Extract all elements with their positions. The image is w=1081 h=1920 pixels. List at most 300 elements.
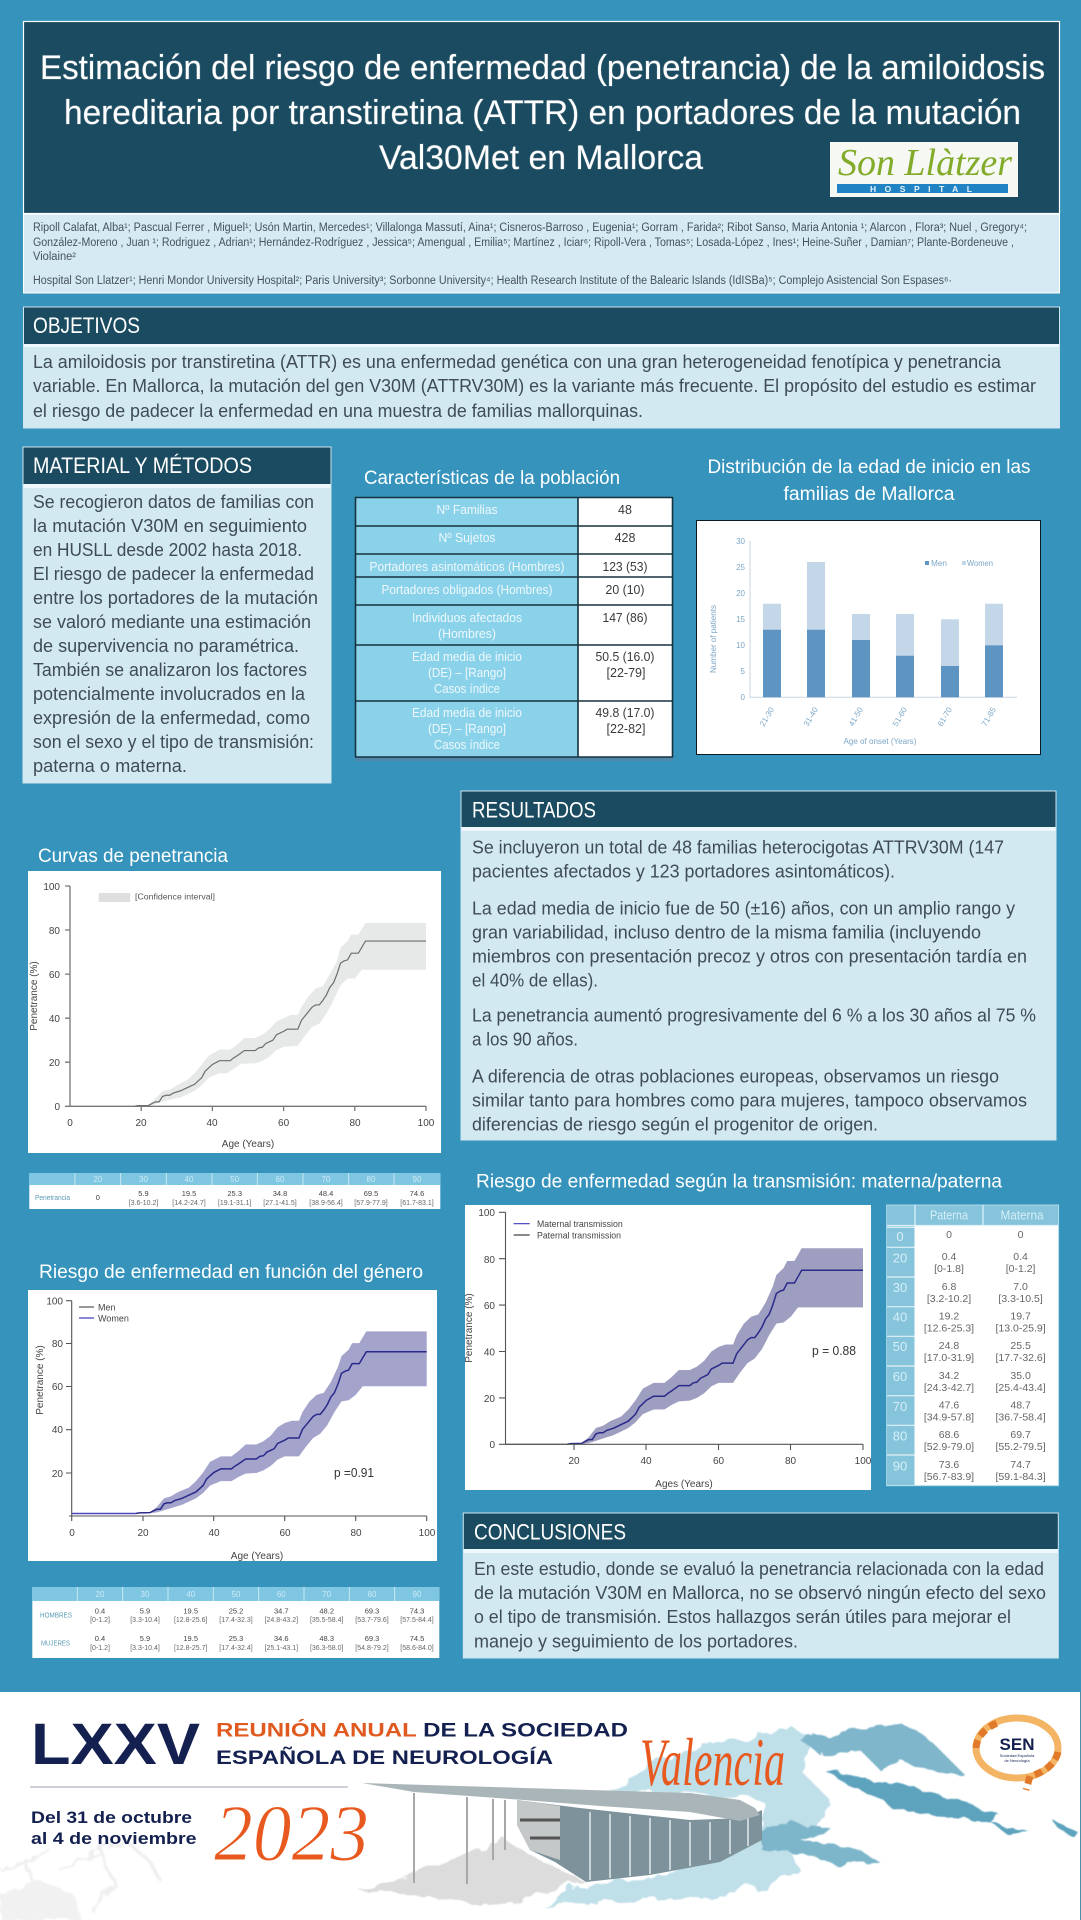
row labels: edades: 0 xyxy=(896,1229,904,1244)
axis labels: 40 xyxy=(206,1118,218,1129)
p value: p =0.91 xyxy=(334,1465,374,1480)
text: material y métodos body: Se recogieron datos de familias con xyxy=(33,492,314,512)
text: resultado 2: gran variabilidad, incluso dentro de la misma familia (incluyendo xyxy=(472,922,981,942)
panel: authors and affiliations: Violaine² xyxy=(33,251,76,263)
axis labels: 0 xyxy=(69,1528,75,1539)
axis labels: 40 xyxy=(52,1425,63,1436)
row: edad media de inicio 2: [22-82] xyxy=(606,722,646,736)
row: mujeres: 0.4 xyxy=(95,1634,105,1643)
row labels: edades: 90 xyxy=(893,1458,907,1474)
column: materna: [25.4-43.4] xyxy=(995,1382,1046,1394)
text: objetivos body: variable. En Mallorca, la mutación del gen V30M (ATTRV30M) es la variante más frecuente. El propósito del estudio es estimar xyxy=(33,376,1036,396)
panel: authors and affiliations xyxy=(24,214,1060,293)
chart: riesgo en función del género xyxy=(28,1290,437,1562)
column: materna: 69.7 xyxy=(1010,1429,1031,1441)
axis labels xyxy=(464,1208,872,1490)
row: mujeres: 34.6 xyxy=(274,1634,289,1643)
row: penetrancia: [3.6-10.2] xyxy=(129,1200,158,1207)
text: conclusiones body: o el tipo de transmisión. Estos hallazgos serán útiles para mejorar el xyxy=(474,1607,1011,1627)
text: material y métodos body xyxy=(33,492,318,776)
row: mujeres: 25.3 xyxy=(229,1634,243,1643)
title: hereditaria por transtiretina (ATTR) en portadores de la mutación xyxy=(64,94,1021,132)
x axis labels: 31-40 xyxy=(802,705,820,728)
row: penetrancia: 5.9 xyxy=(138,1189,149,1198)
row: mujeres: 48.3 xyxy=(319,1634,334,1643)
text: conclusiones body: de la mutación V30M en Mallorca, no se observó ningún efecto del sexo xyxy=(474,1583,1046,1603)
header row: 30 xyxy=(139,1175,148,1184)
legend xyxy=(514,1219,623,1240)
heading: riesgo según género: Riesgo de enfermedad en función del género xyxy=(39,1262,423,1283)
axis labels: 80 xyxy=(49,926,60,937)
text: resultado 4: A diferencia de otras poblaciones europeas, observamos un riesgo xyxy=(472,1066,999,1086)
text: resultado 2: miembros con presentación precoz y otros con presentación tardía en xyxy=(472,947,1027,967)
legend: Men xyxy=(931,559,947,568)
row: portadores obligados xyxy=(382,583,644,597)
row: edad media de inicio 2: 49.8 (17.0) xyxy=(596,706,654,720)
text: material y métodos body: También se analizaron los factores xyxy=(33,660,307,680)
column: paterna: 47.6 xyxy=(939,1400,959,1412)
row: penetrancia: [14.2-24.7] xyxy=(172,1200,206,1207)
row labels: edades: 60 xyxy=(893,1369,907,1384)
header row: 50 xyxy=(232,1590,241,1599)
text: conclusiones body xyxy=(474,1559,1046,1651)
axis labels: 80 xyxy=(350,1528,362,1539)
bar: 21-30 xyxy=(763,604,781,697)
column: materna: 35.0 xyxy=(1010,1370,1031,1382)
axis labels: 20 xyxy=(137,1528,149,1539)
row: mujeres: 5.9 xyxy=(140,1634,150,1643)
axis labels: 100 xyxy=(43,882,60,893)
row: hombres: 0.4 xyxy=(95,1606,105,1616)
y axis labels: 30 xyxy=(736,537,746,546)
axis labels xyxy=(35,1296,436,1562)
column: paterna: 19.2 xyxy=(939,1310,959,1322)
heading: características de la población: Características de la población xyxy=(364,468,620,489)
row: hombres: HOMBRES xyxy=(40,1611,72,1620)
y axis labels xyxy=(736,537,746,702)
column: paterna xyxy=(924,1229,974,1483)
legend: Men xyxy=(98,1302,116,1312)
bar: 51-60 xyxy=(896,614,914,697)
column: materna: 48.7 xyxy=(1010,1400,1031,1412)
column: materna: [36.7-58.4] xyxy=(995,1412,1046,1424)
row: penetrancia: 25.3 xyxy=(227,1189,242,1198)
header row: 60 xyxy=(276,1175,285,1184)
panel: resultados xyxy=(461,791,1056,1140)
row: edad media de inicio 1: (DE) – [Rango] xyxy=(428,666,506,680)
header row xyxy=(96,1590,422,1599)
row: mujeres: [17.4-32.4] xyxy=(219,1645,253,1652)
row: mujeres: 74.5 xyxy=(410,1634,424,1643)
y axis labels: 0 xyxy=(741,693,746,702)
row: penetrancia: Penetrancia xyxy=(35,1193,71,1202)
axis labels: 100 xyxy=(418,1118,435,1129)
row: portadores obligados: Portadores obligados (Hombres) xyxy=(382,583,552,597)
column: paterna: [3.2-10.2] xyxy=(927,1293,971,1305)
text: resultado 4 xyxy=(472,1066,1027,1135)
axis labels: 60 xyxy=(278,1118,290,1129)
row: mujeres: MUJERES xyxy=(41,1639,70,1648)
row: individuos afectados: 147 (86) xyxy=(602,611,648,625)
axis labels: 20 xyxy=(49,1058,60,1069)
chart: curvas de penetrancia xyxy=(28,871,441,1153)
row: hombres: [17.4-32.3] xyxy=(219,1617,253,1624)
column: paterna: 0.4 xyxy=(942,1251,956,1263)
column: materna: [3.3-10.5] xyxy=(998,1293,1043,1305)
text: objetivos body xyxy=(33,352,1036,421)
axes xyxy=(65,886,426,1111)
heading: material y métodos: MATERIAL Y MÉTODOS xyxy=(33,453,252,478)
header row: 40 xyxy=(185,1175,194,1184)
heading: curvas de penetrancia: Curvas de penetrancia xyxy=(38,846,228,867)
axis labels: 40 xyxy=(49,1014,60,1025)
heading: reunión anual xyxy=(216,1720,628,1769)
confidence band and curves xyxy=(506,1248,863,1444)
header row xyxy=(930,1208,1044,1222)
text: fechas: al 4 de noviembre xyxy=(31,1830,196,1848)
column: paterna: 0 xyxy=(946,1229,952,1241)
illustration: edificio xyxy=(358,1783,762,1905)
bar: 41-50 xyxy=(852,614,870,697)
row: hombres: 48.2 xyxy=(319,1606,334,1616)
row: mujeres: [12.8-25.7] xyxy=(174,1645,207,1652)
row: penetrancia: 19.5 xyxy=(182,1189,196,1198)
panel: authors and affiliations: González-Moreno , Juan ¹; Rodriguez , Adrian¹; Hernández-Rodríguez , Jessica⁵; Amengual , Emilia⁵; Martínez , Iciar⁶; Ripoll-Vera , Tomas⁵; Losada-López , Ines¹; Heine-Suñer , Damian⁷; Plante-Bordeneuve , xyxy=(33,237,1014,249)
column: materna: [59.1-84.3] xyxy=(995,1471,1046,1483)
heading: resultados: RESULTADOS xyxy=(472,798,596,823)
text: resultado 3: a los 90 años. xyxy=(472,1030,578,1050)
logo: Son Llàtzer Hospital: HOSPITAL xyxy=(870,184,972,194)
x axis labels: 71-85 xyxy=(980,705,998,728)
chart: distribución de edad de inicio (barras apiladas) xyxy=(696,520,1040,754)
column: materna xyxy=(995,1229,1046,1483)
panel: conclusiones xyxy=(463,1513,1058,1658)
column: materna: 0 xyxy=(1018,1229,1024,1241)
panel: objetivos xyxy=(24,307,1060,428)
row: hombres: [24.8-43.2] xyxy=(265,1617,298,1624)
row: penetrancia xyxy=(35,1189,434,1207)
axis labels: 80 xyxy=(349,1118,361,1129)
axis labels: 20 xyxy=(52,1469,63,1480)
axis title: number of patients: Number of patients xyxy=(709,605,718,673)
row: Nº familias xyxy=(436,503,632,517)
row: hombres: [0-1.2] xyxy=(90,1617,110,1624)
legend xyxy=(925,559,993,568)
row: edad media de inicio 1: Edad media de inicio xyxy=(412,650,522,664)
row: Nº familias: Nº Familias xyxy=(436,503,498,517)
text: material y métodos body: paterna o materna. xyxy=(33,756,187,776)
x axis labels xyxy=(758,705,998,728)
axis labels xyxy=(29,882,435,1150)
column: materna: 25.5 xyxy=(1010,1340,1031,1352)
row: mujeres: [25.1-43.1] xyxy=(265,1645,298,1652)
row: edad media de inicio 1 xyxy=(412,650,654,696)
table: hombres y mujeres por edad xyxy=(32,1587,439,1658)
header row: 70 xyxy=(322,1175,331,1184)
row: hombres: 25.2 xyxy=(229,1606,243,1616)
panel: authors and affiliations: Hospital Son Llatzer¹; Henri Mondor University Hospital²; Paris University³; Sorbonne University⁴; Health Research Institute of the Balearic Islands (IdISBa)⁵; Complejo Asistencial Son Espases⁶· xyxy=(33,275,952,287)
title xyxy=(40,49,1045,177)
legend: [Confidence interval] xyxy=(135,892,215,902)
row: edad media de inicio 1: [22-79] xyxy=(606,666,646,680)
axis labels: Penetrance (%) xyxy=(464,1293,475,1363)
footer: banner LXXV Reunión Anual SEN xyxy=(0,1692,1081,1920)
text: objetivos body: el riesgo de padecer la enfermedad en una muestra de familias mallorquinas. xyxy=(33,401,643,421)
row: mujeres xyxy=(41,1634,434,1652)
row labels: edades: 30 xyxy=(893,1280,907,1295)
row: mujeres: [58.6-84.0] xyxy=(400,1645,434,1652)
axis labels: 80 xyxy=(484,1255,495,1266)
row: edad media de inicio 2 xyxy=(412,706,654,752)
heading: conclusiones: CONCLUSIONES xyxy=(474,1520,626,1545)
axis labels: Ages (Years) xyxy=(655,1479,713,1490)
panel: authors and affiliations: Ripoll Calafat, Alba¹; Pascual Ferrer , Miguel¹; Usón Martin, Mercedes¹; Villalonga Massutí, Aina¹; Cisneros-Barroso , Eugenia¹; Gorram , Farida²; Ribot Sanso, Maria Antonia ¹; Alarcon , Flora³; Nuel , Gregory⁴; xyxy=(33,222,1027,234)
text: material y métodos body: El riesgo de padecer la enfermedad xyxy=(33,564,314,584)
row labels: edades: 80 xyxy=(893,1428,907,1444)
text: resultado 4: diferencias de riesgo según el progenitor de origen. xyxy=(472,1115,878,1135)
x axis labels: 51-60 xyxy=(891,705,909,728)
row: individuos afectados xyxy=(412,611,648,641)
text: resultado 2: el 40% de ellas). xyxy=(472,971,598,991)
row: mujeres: [36.3-58.0] xyxy=(310,1645,343,1652)
column: materna: [55.2-79.5] xyxy=(995,1441,1046,1453)
y axis labels: 20 xyxy=(736,589,746,598)
axes xyxy=(66,1301,427,1521)
text: resultado 4: similar tanto para hombres como para mujeres, tampoco observamos xyxy=(472,1091,1027,1111)
y axis labels: 25 xyxy=(736,563,746,572)
axis labels: 20 xyxy=(484,1394,495,1405)
axes xyxy=(499,1212,863,1450)
text: material y métodos body: en HUSLL desde 2002 hasta 2018. xyxy=(33,540,302,560)
row: mujeres: [0-1.2] xyxy=(90,1645,110,1652)
row: Nº sujetos: 428 xyxy=(615,531,635,545)
row: penetrancia: 74.6 xyxy=(410,1189,424,1198)
text: fechas xyxy=(31,1809,196,1848)
axis labels: 20 xyxy=(568,1456,580,1467)
axis labels: 40 xyxy=(484,1348,495,1358)
header row: 40 xyxy=(186,1590,196,1599)
column: materna: [17.7-32.6] xyxy=(995,1352,1046,1364)
text: resultado 1: pacientes afectados y 123 portadores asintomáticos). xyxy=(472,862,895,882)
row: Nº sujetos: Nº Sujetos xyxy=(438,531,496,545)
header row xyxy=(93,1175,422,1184)
row: penetrancia: 69.5 xyxy=(364,1189,378,1198)
column: paterna: 34.2 xyxy=(939,1370,959,1382)
row: hombres: [12.8-25.6] xyxy=(174,1617,207,1624)
legend: Women xyxy=(98,1314,129,1324)
header row: 70 xyxy=(322,1590,332,1599)
column: paterna: [34.9-57.8] xyxy=(924,1412,974,1424)
legend: Maternal transmission xyxy=(537,1219,623,1229)
row: penetrancia: [57.9-77.9] xyxy=(354,1200,388,1207)
row: hombres: 19.5 xyxy=(183,1606,198,1616)
axis labels: Age (Years) xyxy=(222,1139,274,1150)
chart: riesgo según la transmisión xyxy=(464,1205,872,1490)
column: paterna: [24.3-42.7] xyxy=(924,1382,974,1394)
text: resultado 2 xyxy=(472,898,1027,991)
text: resultado 3: La penetrancia aumentó progresivamente del 6 % a los 30 años al 75 % xyxy=(472,1006,1036,1026)
logo: SEN: Sociedad Española xyxy=(1000,1753,1035,1758)
axis labels: 100 xyxy=(855,1456,872,1467)
text: fechas: Del 31 de octubre xyxy=(31,1809,192,1827)
axis labels: 60 xyxy=(484,1301,495,1312)
header row: 30 xyxy=(141,1590,150,1599)
row: mujeres: [3.3-10.4] xyxy=(130,1645,160,1652)
row: hombres: [57.5-84.4] xyxy=(400,1617,434,1624)
title: Val30Met en Mallorca xyxy=(379,139,703,177)
column: paterna: 73.6 xyxy=(939,1459,959,1471)
legend: Paternal transmission xyxy=(537,1230,621,1240)
bar: 31-40 xyxy=(807,562,825,697)
panel: title banner xyxy=(24,22,1060,214)
row labels: edades: 20 xyxy=(893,1250,907,1266)
row: hombres: 34.7 xyxy=(274,1606,289,1616)
text: material y métodos body: expresión de la enfermedad, como xyxy=(33,708,310,728)
axis labels: 100 xyxy=(478,1208,495,1219)
p value: p = 0.88 xyxy=(812,1343,856,1358)
text: objetivos body: La amiloidosis por transtiretina (ATTR) es una enfermedad genética con una gran heterogeneidad fenotípica y penetrancia xyxy=(33,352,1002,372)
axis title: age of onset: Age of onset (Years) xyxy=(844,737,917,746)
axis labels: 40 xyxy=(640,1456,652,1467)
header row: Paterna xyxy=(930,1208,969,1222)
axis labels: 0 xyxy=(67,1118,73,1129)
row: penetrancia: [19.1-31.1] xyxy=(218,1200,251,1207)
row: portadores asintomáticos: Portadores asintomáticos (Hombres) xyxy=(370,560,564,574)
row: edad media de inicio 2: Casos índice xyxy=(434,738,500,752)
row: penetrancia: [38.9-56.4] xyxy=(309,1200,343,1207)
header row: 80 xyxy=(368,1590,377,1599)
confidence band and curves xyxy=(72,1331,427,1514)
column: paterna: [12.6-25.3] xyxy=(924,1322,974,1334)
heading: distribución de la edad de inicio: Distribución de la edad de inicio en las xyxy=(708,457,1030,478)
table: penetrancia por edad xyxy=(29,1173,440,1209)
text: material y métodos body: se valoró mediante una estimación xyxy=(33,612,311,632)
heading: objetivos: OBJETIVOS xyxy=(33,313,140,338)
row: hombres: [35.5-58.4] xyxy=(310,1617,343,1624)
column: paterna: [56.7-83.9] xyxy=(924,1471,974,1483)
row labels: edades: 70 xyxy=(893,1399,907,1414)
logo: SEN: SEN xyxy=(1000,1735,1034,1754)
bar: 61-70 xyxy=(941,619,959,697)
table: características de la población xyxy=(355,497,673,761)
axis labels: Penetrance (%) xyxy=(35,1345,46,1415)
text: material y métodos body: entre los portadores de la mutación xyxy=(33,588,318,608)
column: paterna: 68.6 xyxy=(939,1429,959,1441)
illustration: acuarela azul xyxy=(545,1722,1076,1908)
text: Valencia: Valencia xyxy=(640,1724,785,1800)
legend xyxy=(79,1302,129,1324)
y axis labels: 10 xyxy=(736,641,746,650)
text: resultado 1: Se incluyeron un total de 48 familias heterocigotas ATTRV30M (147 xyxy=(472,837,1004,857)
axis labels: 60 xyxy=(52,1382,63,1393)
row: edad media de inicio 2: Edad media de inicio xyxy=(412,706,522,720)
column: materna: 7.0 xyxy=(1013,1281,1028,1293)
axis labels: 80 xyxy=(52,1339,63,1350)
row: penetrancia: [61.7-83.1] xyxy=(400,1200,434,1207)
row: Nº sujetos xyxy=(438,531,635,545)
text: material y métodos body: potencialmente involucrados en la xyxy=(33,684,306,704)
row: penetrancia: 34.8 xyxy=(273,1189,287,1198)
text: resultado 1 xyxy=(472,837,1004,882)
row labels: edades xyxy=(893,1229,907,1474)
row: penetrancia: 0 xyxy=(96,1193,100,1202)
header row: 50 xyxy=(230,1175,240,1184)
axis labels: 60 xyxy=(713,1456,724,1467)
x axis labels: 41-50 xyxy=(847,705,865,728)
row: hombres: 74.3 xyxy=(410,1606,424,1616)
text: material y métodos body: la mutación V30M en seguimiento xyxy=(33,516,307,536)
axis labels: 60 xyxy=(49,970,60,981)
logo text: LXXV: LXXV xyxy=(31,1712,200,1777)
text: material y métodos body: de supervivencia no paramétrica. xyxy=(33,636,299,656)
header row: 20 xyxy=(93,1175,103,1184)
axis labels: 80 xyxy=(785,1456,796,1467)
logo: SEN: de Neurología xyxy=(1004,1758,1030,1763)
heading: reunión anual: ESPAÑOLA DE NEUROLOGÍA xyxy=(216,1747,553,1769)
text: conclusiones body: manejo y seguimiento de los portadores. xyxy=(474,1631,798,1651)
legend xyxy=(99,892,215,902)
row: individuos afectados: (Hombres) xyxy=(438,627,496,641)
axis labels: 40 xyxy=(208,1528,220,1539)
header row: 90 xyxy=(413,1590,422,1599)
row labels: edades: 50 xyxy=(893,1339,907,1354)
heading: distribución de la edad de inicio: familias de Mallorca xyxy=(784,484,955,505)
column: paterna: 6.8 xyxy=(942,1281,956,1293)
row: edad media de inicio 1: Casos índice xyxy=(434,682,500,696)
legend: Women xyxy=(967,559,993,568)
header row: 60 xyxy=(277,1590,286,1599)
row: portadores asintomáticos: 123 (53) xyxy=(602,560,648,574)
text: conclusiones body: En este estudio, donde se evaluó la penetrancia relacionada con la edad xyxy=(474,1559,1044,1579)
row: individuos afectados: Individuos afectados xyxy=(412,611,522,625)
row: penetrancia: 48.4 xyxy=(319,1189,333,1198)
heading: riesgo según la transmisión: Riesgo de enfermedad según la transmisión: materna/paterna xyxy=(476,1172,1002,1193)
y axis labels: 15 xyxy=(736,615,746,624)
header row: 90 xyxy=(413,1175,422,1184)
heading: reunión anual: REUNIÓN ANUAL DE LA SOCIEDAD xyxy=(216,1720,628,1742)
row: hombres: 5.9 xyxy=(140,1606,150,1616)
row: penetrancia: [27.1-41.5] xyxy=(263,1200,297,1207)
row: Nº familias: 48 xyxy=(618,503,632,517)
table: paterna y materna por edad xyxy=(887,1205,1059,1486)
column: paterna: [17.0-31.9] xyxy=(924,1352,974,1364)
axis labels: Penetrance (%) xyxy=(29,961,40,1031)
row: mujeres: 19.5 xyxy=(183,1634,198,1643)
text: material y métodos body: son el sexo y el tipo de transmisión: xyxy=(33,732,314,752)
row: edad media de inicio 2: (DE) – [Rango] xyxy=(428,722,506,736)
row labels: edades: 40 xyxy=(893,1310,907,1324)
row: hombres xyxy=(40,1606,434,1624)
column: materna: 0.4 xyxy=(1013,1251,1028,1263)
text: 2023: 2023 xyxy=(214,1790,369,1878)
logo: Son Llàtzer Hospital: Son Llàtzer xyxy=(838,142,1012,184)
panel: material y métodos xyxy=(23,447,331,783)
row: portadores obligados: 20 (10) xyxy=(606,583,644,597)
y axis labels: 5 xyxy=(741,667,746,676)
axis labels: 0 xyxy=(489,1440,495,1451)
logo: SEN xyxy=(976,1718,1058,1790)
text: resultado 2: La edad media de inicio fue de 50 (±16) años, con un amplio rango y xyxy=(472,898,1015,918)
x axis labels: 61-70 xyxy=(936,705,954,728)
row: hombres: [3.3-10.4] xyxy=(130,1617,160,1624)
row: hombres: 69.3 xyxy=(365,1606,379,1616)
header row: Materna xyxy=(1000,1208,1044,1222)
row: mujeres: [54.8-79.2] xyxy=(355,1645,389,1652)
header row: 80 xyxy=(367,1175,376,1184)
heading: distribución de la edad de inicio xyxy=(708,457,1030,505)
decorative neuron silhouette xyxy=(0,1840,160,1920)
column: materna: 19.7 xyxy=(1010,1310,1031,1322)
